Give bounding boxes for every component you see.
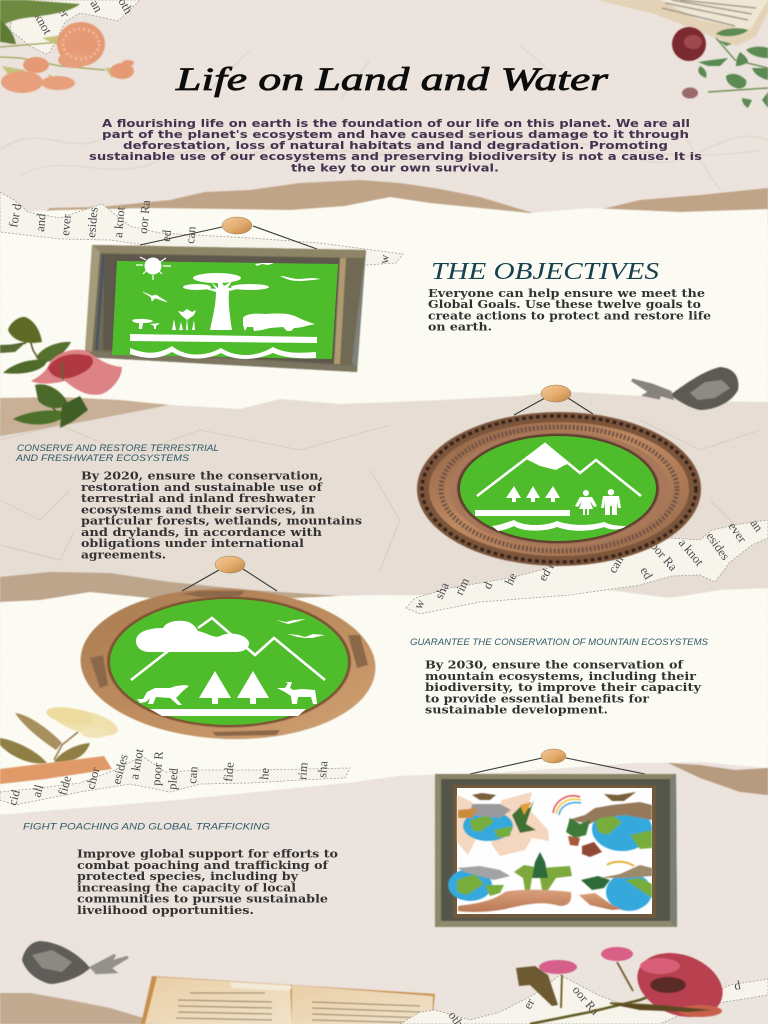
body text: restoration and sustainable use of <box>81 481 324 494</box>
beige band 2 <box>0 391 768 602</box>
body text: agreements. <box>81 548 166 562</box>
body text: By 2020, ensure the conservation, <box>81 470 323 482</box>
body text: communities to pursue sustainable <box>77 892 328 906</box>
green icon panel <box>112 261 338 359</box>
body text <box>425 658 702 716</box>
newspaper strip: lower left: fide <box>55 774 74 797</box>
newspaper strip: right: ed r <box>535 559 558 584</box>
green icon panel <box>110 599 348 725</box>
oval bronze frame <box>417 412 701 566</box>
framed picture 4: globes and wildlife <box>435 749 677 927</box>
torn brown strip: right <box>668 763 768 795</box>
illustration: moth, bottom left <box>22 941 128 984</box>
upper right globe and rainbow <box>553 792 652 857</box>
body text: protected species, including by <box>77 870 299 883</box>
newspaper strip: lower left: pled <box>165 767 181 790</box>
body text <box>77 848 338 917</box>
intro paragraph: the key to our own survival. <box>291 162 499 174</box>
icon: life on land <box>130 257 321 359</box>
framed picture 3: wooden oval, mountains and wildlife <box>78 556 378 744</box>
newspaper strip: upper left: a knot <box>111 206 128 238</box>
illustration: red rose with leaves <box>0 317 122 428</box>
hanging wire and nail <box>514 385 593 415</box>
newspaper strip: lower left: can <box>185 765 201 784</box>
torn brown strip: left middle <box>0 397 170 437</box>
newspaper strip: right: d <box>480 579 496 591</box>
body text <box>428 287 711 334</box>
mountain outline <box>131 618 325 680</box>
hanging wire and nail <box>140 217 317 249</box>
open book: bottom <box>141 976 435 1024</box>
framed picture 2: bronze oval, mountains and people <box>417 385 701 566</box>
body text: obligations under international <box>81 537 304 550</box>
newspaper strip: lower left: esides <box>109 753 131 786</box>
newspaper strip: right: w <box>411 597 428 611</box>
newspaper strip: right: he <box>502 570 520 587</box>
newspaper strip: right: ever <box>726 520 750 546</box>
newspaper strip: lower left: a knot <box>127 747 146 781</box>
body text: on earth. <box>428 320 492 334</box>
sub-heading: GUARANTEE THE CONSERVATION OF MOUNTAIN ECOSYSTEMS <box>410 637 709 648</box>
newspaper strip: top left <box>10 0 140 54</box>
newspaper strip: lower left: all <box>29 783 46 799</box>
upper left hands and globe <box>457 792 549 856</box>
body text <box>81 470 362 562</box>
antelope <box>277 682 317 704</box>
body text: Global Goals. Use these twelve goals to <box>428 298 701 311</box>
white picture panel <box>457 788 652 914</box>
newspaper strip: top left: knot <box>31 10 55 37</box>
trees <box>506 486 560 502</box>
newspaper strip: upper left: for d <box>6 202 24 229</box>
orange tape <box>0 756 112 784</box>
intro paragraph: sustainable use of our ecosystems and preserving biodiversity is not a cause. It is <box>89 150 702 163</box>
section: fight poaching <box>23 822 338 917</box>
grass and plant <box>172 309 196 330</box>
body text: livelihood opportunities. <box>77 904 254 917</box>
newspaper strip: bottom right <box>400 975 768 1024</box>
lower right hand and globe <box>579 862 652 911</box>
body text: particular forests, wetlands, mountains <box>81 514 362 528</box>
body text: mountain ecosystems, including their <box>425 670 696 683</box>
sub-heading <box>15 443 219 464</box>
creases in band 2 <box>0 420 760 570</box>
newspaper strip: lower left: rim <box>295 761 311 780</box>
sub-heading: FIGHT POACHING AND GLOBAL TRAFFICKING <box>23 822 271 832</box>
dragonfly <box>143 292 167 302</box>
rectangular frame <box>85 245 366 372</box>
body text: Everyone can help ensure we meet the <box>428 287 705 300</box>
illustration: red rose, top right <box>672 27 768 108</box>
intro paragraph: part of the planet's ecosystem and have caused serious damage to it through <box>102 128 689 141</box>
newspaper strip: bottom right: d <box>733 978 742 993</box>
newspaper strip: lower left: poor R <box>149 750 166 786</box>
newspaper strip: upper left: oor Ra <box>136 199 153 234</box>
section: the objectives <box>428 259 711 334</box>
cloud <box>136 621 249 652</box>
body text: to provide essential benefits for <box>425 692 649 706</box>
hanging wire and nail <box>182 556 277 591</box>
newspaper strip: right: can <box>605 553 627 576</box>
mushrooms <box>132 319 160 329</box>
icon: mountains and wildlife <box>131 618 325 716</box>
section: conserve and restore <box>15 443 362 562</box>
newspaper strip: lower left: fide <box>221 761 237 782</box>
wolf <box>137 685 189 705</box>
body text: ecosystems and their services, in <box>81 504 315 516</box>
rhino <box>243 313 315 331</box>
intro paragraph: deforestation, loss of natural habitats and land degradation. Promoting <box>123 139 668 152</box>
heading: THE OBJECTIVES <box>431 259 659 285</box>
birds <box>276 619 325 638</box>
newspaper strip: right <box>406 517 768 614</box>
newspaper strip: lower left <box>0 747 350 807</box>
newspaper strip: lower left: sha <box>315 760 330 778</box>
body text: create actions to protect and restore life <box>428 310 711 322</box>
newspaper strip: upper left: and <box>33 212 49 232</box>
body text: and drylands, in accordance with <box>81 526 322 539</box>
ground and water <box>475 510 626 531</box>
title: Life on Land and Water <box>175 62 608 98</box>
cream band 2 <box>0 588 768 815</box>
framed picture 1: life on land <box>85 217 366 372</box>
sub-heading: AND FRESHWATER ECOSYSTEMS <box>15 453 190 464</box>
icon: mountains and people <box>475 444 641 531</box>
newspaper strip: right: ed <box>637 564 656 582</box>
body text: Improve global support for efforts to <box>77 848 338 860</box>
open book: top right <box>597 0 768 46</box>
illustration: orange flowers, top left <box>0 0 134 93</box>
illustration: globes, hands and animals <box>448 792 652 912</box>
intro paragraph <box>89 117 702 174</box>
body text: sustainable development. <box>425 704 608 716</box>
body text: increasing the capacity of local <box>77 882 296 894</box>
intro paragraph: A flourishing life on earth is the foundation of our life on this planet. We are all <box>102 117 690 130</box>
newspaper strip: right: a knot <box>676 536 707 569</box>
newspaper strip: upper left: esides <box>84 206 101 238</box>
torn brown strip: header <box>30 180 768 232</box>
body text: By 2030, ensure the conservation of <box>425 658 685 672</box>
section: guarantee mountain conservation <box>410 637 709 716</box>
newspaper strip: bottom right: oor Ra <box>570 983 602 1018</box>
snow cap <box>526 444 570 470</box>
illustration: dried yellow flower <box>0 703 121 764</box>
newspaper strip: right: esides <box>704 530 733 563</box>
beige band 3 <box>0 763 768 1024</box>
oval wood frame <box>78 584 378 744</box>
green icon panel <box>460 436 656 541</box>
rectangular frame <box>435 774 677 927</box>
newspaper strip: right: an <box>748 517 766 535</box>
birds <box>255 263 321 281</box>
ground bar <box>150 709 306 716</box>
newspaper strip: right: rim <box>452 575 472 597</box>
body text: combat poaching and trafficking of <box>77 859 330 872</box>
newspaper strip: bottom right: er <box>520 995 538 1012</box>
body text: terrestrial and inland freshwater <box>81 492 315 505</box>
newspaper strip: upper left: can <box>183 225 199 244</box>
newspaper strip: top left: er <box>55 5 73 21</box>
sun <box>136 257 171 280</box>
newspaper strip: upper left: ed <box>159 229 174 242</box>
illustration: moth, right <box>632 367 738 410</box>
newspaper strip: lower left: chor <box>83 765 103 791</box>
newspaper strip: upper left: w <box>377 254 392 264</box>
newspaper strip: lower left: he <box>257 767 272 780</box>
mountain outline <box>477 444 641 496</box>
illustration: pressed pink flower <box>516 942 732 1024</box>
torn brown strip: lower left <box>0 572 340 604</box>
sub-heading: CONSERVE AND RESTORE TERRESTRIAL <box>17 443 219 454</box>
ground and water <box>130 334 317 359</box>
lower left tree and globe <box>448 852 572 912</box>
newspaper strip: right: sha <box>432 580 452 601</box>
cream band 1 <box>0 197 768 410</box>
hanging wire and nail <box>470 749 645 774</box>
woman <box>575 490 597 515</box>
body text: biodiversity, to improve their capacity <box>425 681 702 694</box>
newspaper strip: upper left: ever <box>58 213 74 236</box>
trees <box>199 671 269 704</box>
man <box>601 489 621 515</box>
newspaper strip: right: oor Ra <box>648 539 680 574</box>
baobab tree <box>183 273 269 330</box>
newspaper strip: lower left: cid <box>5 788 23 807</box>
newspaper strip: upper left <box>0 192 403 265</box>
torn brown strip: bottom left <box>0 993 155 1024</box>
